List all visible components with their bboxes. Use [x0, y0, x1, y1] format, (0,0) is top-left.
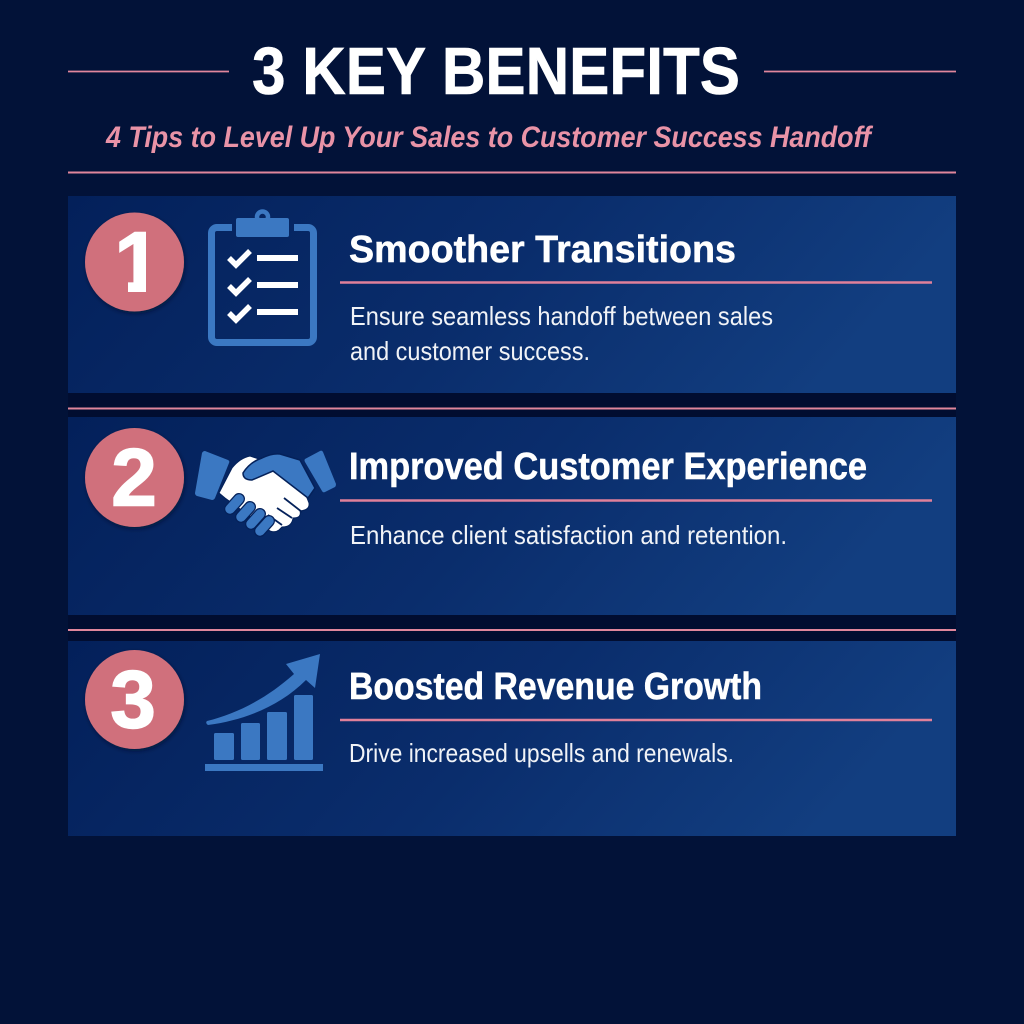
number badge 1 — [85, 212, 184, 312]
body text: Drive increased upsells and renewals. — [349, 738, 734, 768]
heading: Boosted Revenue Growth — [349, 666, 762, 708]
icon: clipboard checklist — [212, 212, 314, 342]
body text: and customer success. — [350, 336, 590, 366]
icon: growth chart — [205, 654, 323, 771]
number badge 1: 1 — [114, 215, 162, 311]
heading: Improved Customer Experience — [349, 446, 867, 488]
heading: Smoother Transitions — [349, 229, 736, 271]
number badge 2 — [85, 428, 184, 527]
panel: improved customer experience — [68, 417, 956, 615]
icon: handshake — [195, 451, 336, 532]
panel: smoother transitions — [68, 196, 956, 393]
body text: Enhance client satisfaction and retention. — [350, 520, 787, 550]
body text — [350, 301, 773, 366]
number badge 3 — [85, 650, 184, 749]
title: 3 KEY BENEFITS — [252, 34, 740, 109]
number badge 3: 3 — [110, 654, 156, 746]
number badge 2: 2 — [111, 432, 157, 524]
body text: Ensure seamless handoff between sales — [350, 301, 773, 331]
panel: boosted revenue growth — [68, 641, 956, 836]
subtitle: 4 Tips to Level Up Your Sales to Customer Success Handoff — [105, 121, 874, 154]
